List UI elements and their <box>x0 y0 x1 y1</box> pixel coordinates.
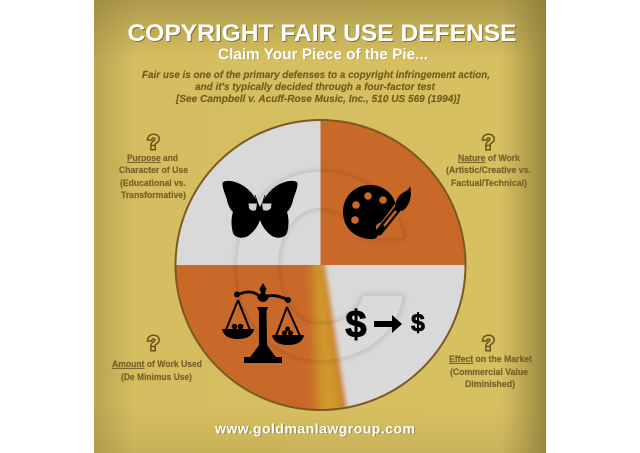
factor: amount: (De Minimus Use) <box>121 372 192 382</box>
intro text: Fair use is one of the primary defenses to a copyright infringement action, <box>142 69 490 81</box>
factor: nature: Factual/Technical) <box>451 178 527 188</box>
pie chart <box>170 115 470 420</box>
intro text <box>142 69 490 105</box>
factor: purpose: Transformative) <box>121 190 186 200</box>
icon: question mark: ? <box>147 333 160 355</box>
factor: nature <box>446 132 531 188</box>
left pan <box>222 300 254 339</box>
factor: effect: (Commercial Value <box>450 367 528 377</box>
title: COPYRIGHT FAIR USE DEFENSE <box>128 20 516 47</box>
right pan <box>272 307 304 345</box>
intro text: [See Campbell v. Acuff-Rose Music, Inc., 510 US 569 (1994)] <box>175 93 460 105</box>
pie quadrants <box>170 115 470 420</box>
factor: effect: Diminished) <box>465 379 515 389</box>
factor: amount: Amount of Work Used <box>112 359 202 369</box>
icon: question mark: ? <box>482 333 495 355</box>
website url: www.goldmanlawgroup.com <box>215 421 416 437</box>
pie border <box>176 120 465 410</box>
factor: purpose <box>119 132 188 200</box>
copyright symbol face <box>237 172 403 360</box>
icon: butterfly <box>222 181 298 238</box>
factor: effect: Effect on the Market <box>449 354 532 364</box>
icon: scales of justice <box>222 283 304 363</box>
factor: nature: (Artistic/Creative vs. <box>446 165 531 175</box>
butterfly eyes <box>248 204 272 211</box>
subtitle: Claim Your Piece of the Pie... <box>218 47 428 64</box>
factor: purpose: Purpose and <box>127 153 178 163</box>
factor: amount <box>112 333 202 382</box>
copyright symbol shadow <box>237 172 403 360</box>
icon: palette <box>343 185 411 239</box>
factor: purpose: (Educational vs. <box>120 178 186 188</box>
icon: dollar to smaller dollar <box>345 304 425 346</box>
intro text: and it's typically decided through a four-factor test <box>195 81 435 93</box>
background panel <box>94 0 546 453</box>
factor: nature: Nature of Work <box>458 153 521 163</box>
icon: dollar to smaller dollar: $ <box>345 304 367 346</box>
icon: dollar to smaller dollar: $ <box>411 309 425 337</box>
title: COPYRIGHT FAIR USE DEFENSE <box>128 21 518 48</box>
subtitle: Claim Your Piece of the Pie... <box>218 46 428 64</box>
factor: effect <box>449 333 532 389</box>
factor: purpose: Character of Use <box>119 165 188 175</box>
icon: question mark: ? <box>482 132 495 154</box>
website url: www.goldmanlawgroup.com <box>214 420 415 436</box>
icon: question mark: ? <box>147 132 160 154</box>
